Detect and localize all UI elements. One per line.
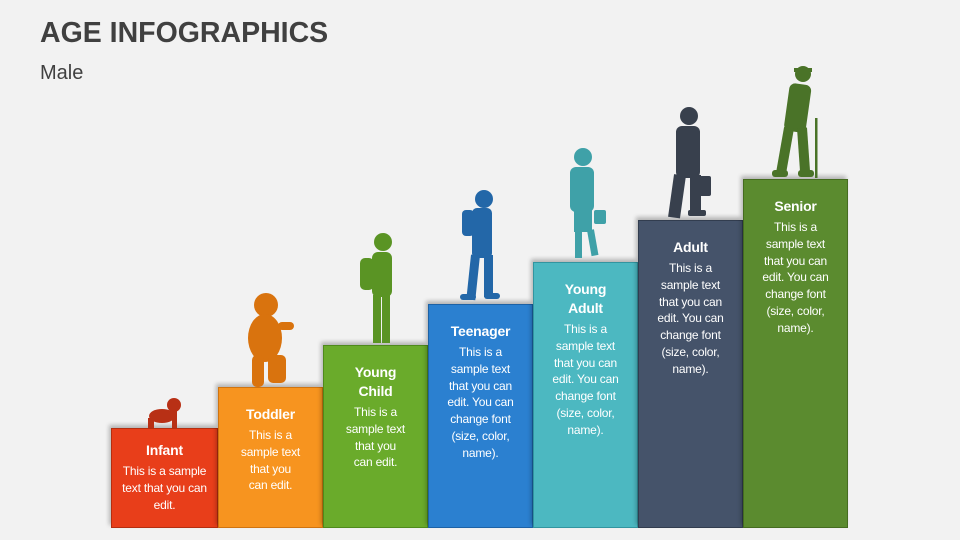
bar: senior: name). — [777, 321, 814, 335]
bar: young adult: that you can — [554, 356, 617, 370]
icon: adult — [668, 107, 711, 218]
bar: teenager — [428, 304, 533, 528]
bar: adult: This is a — [669, 261, 712, 275]
bar: young child: This is a — [354, 405, 397, 419]
bar: young adult: Adult — [568, 300, 603, 316]
bar: young adult: Young — [565, 281, 606, 297]
bar: toddler: that you — [250, 462, 291, 476]
bar: infant: Infant — [146, 442, 183, 458]
bar: infant: This is a sample text that you can edit. — [122, 464, 207, 512]
bar: senior: change font — [765, 287, 826, 301]
bar: infant — [111, 428, 218, 528]
bar: teenager: change font — [450, 412, 511, 426]
bar: toddler: This is a — [249, 428, 292, 442]
bar: senior: (size, color, — [766, 304, 825, 318]
bar: young child: Child — [358, 383, 392, 399]
bar: teenager: This is a — [459, 345, 502, 359]
bar: senior: Senior — [774, 198, 817, 214]
bar: young child: Young — [355, 364, 396, 380]
bar: adult: change font — [660, 328, 721, 342]
bar: toddler — [218, 387, 323, 528]
bar: young adult: sample text — [556, 339, 615, 353]
bar: adult: name). — [672, 362, 709, 376]
icon: young child — [360, 233, 392, 343]
bar: adult: that you can — [659, 295, 722, 309]
bar: teenager: sample text — [451, 362, 510, 376]
bar: toddler: Toddler — [246, 406, 295, 422]
bar: toddler: can edit. — [249, 478, 292, 492]
bar: young adult: edit. You can — [552, 372, 619, 386]
bar: toddler: sample text — [241, 445, 300, 459]
bar: adult: Adult — [673, 239, 708, 255]
bar: senior: edit. You can — [762, 270, 829, 284]
icon: infant crawling — [148, 398, 181, 428]
bar: adult: edit. You can — [657, 311, 724, 325]
bar: teenager: (size, color, — [451, 429, 510, 443]
title: AGE INFOGRAPHICS — [40, 17, 328, 49]
bar: adult: sample text — [661, 278, 720, 292]
bar: young adult: change font — [555, 389, 616, 403]
icon: teenager — [460, 190, 500, 300]
icon: young adult — [570, 148, 606, 258]
bar: adult: (size, color, — [661, 345, 720, 359]
bar: senior: that you can — [764, 254, 827, 268]
icon: toddler — [248, 293, 294, 387]
bar: teenager: edit. You can — [447, 395, 514, 409]
subtitle: Male — [40, 62, 83, 84]
bar: adult — [638, 220, 743, 528]
bar: senior: This is a — [774, 220, 817, 234]
bar: teenager: name). — [462, 446, 499, 460]
bar: young child — [323, 345, 428, 528]
bar: senior: sample text — [766, 237, 825, 251]
bar: young adult: (size, color, — [556, 406, 615, 420]
bar: young adult — [533, 262, 638, 528]
bar: young child: can edit. — [354, 455, 397, 469]
icon: senior — [772, 66, 818, 178]
bar: teenager: Teenager — [451, 323, 510, 339]
bar: young adult: name). — [567, 423, 604, 437]
bar: teenager: that you can — [449, 379, 512, 393]
bar: young child: that you — [355, 439, 396, 453]
bar: young adult: This is a — [564, 322, 607, 336]
bar: young child: sample text — [346, 422, 405, 436]
bar: senior — [743, 179, 848, 528]
